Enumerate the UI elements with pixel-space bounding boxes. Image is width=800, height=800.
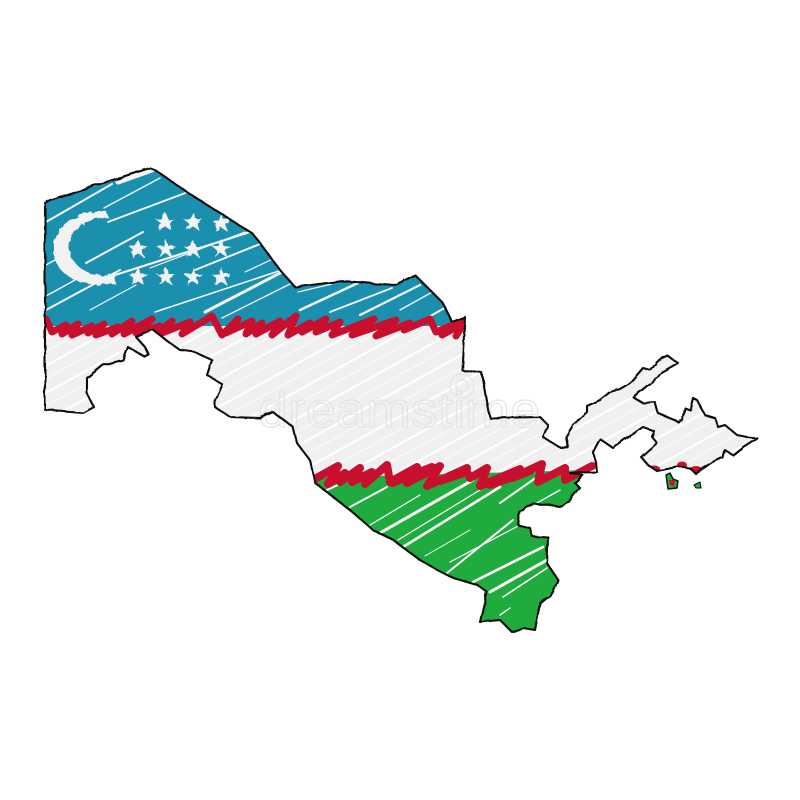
map fill: flag scribble clipped to country (45, 170, 752, 631)
stars (128, 212, 231, 285)
scribble band: lower red (313, 464, 592, 486)
scribble band: upper red (46, 316, 464, 336)
flag band: teal (45, 170, 464, 326)
watermark: dreamstime (258, 382, 540, 438)
crescent (53, 211, 116, 285)
flag band: green (316, 470, 590, 631)
green scribble highlights (327, 467, 560, 615)
infographic: Uzbekistan map scribble (42, 168, 758, 634)
teal scribble highlights (44, 170, 448, 322)
map outline (45, 168, 757, 632)
island: southeast large (666, 473, 678, 489)
east red flecks (651, 462, 706, 472)
island: southeast small (694, 482, 701, 488)
flag band: white with pale scribble (45, 326, 590, 478)
